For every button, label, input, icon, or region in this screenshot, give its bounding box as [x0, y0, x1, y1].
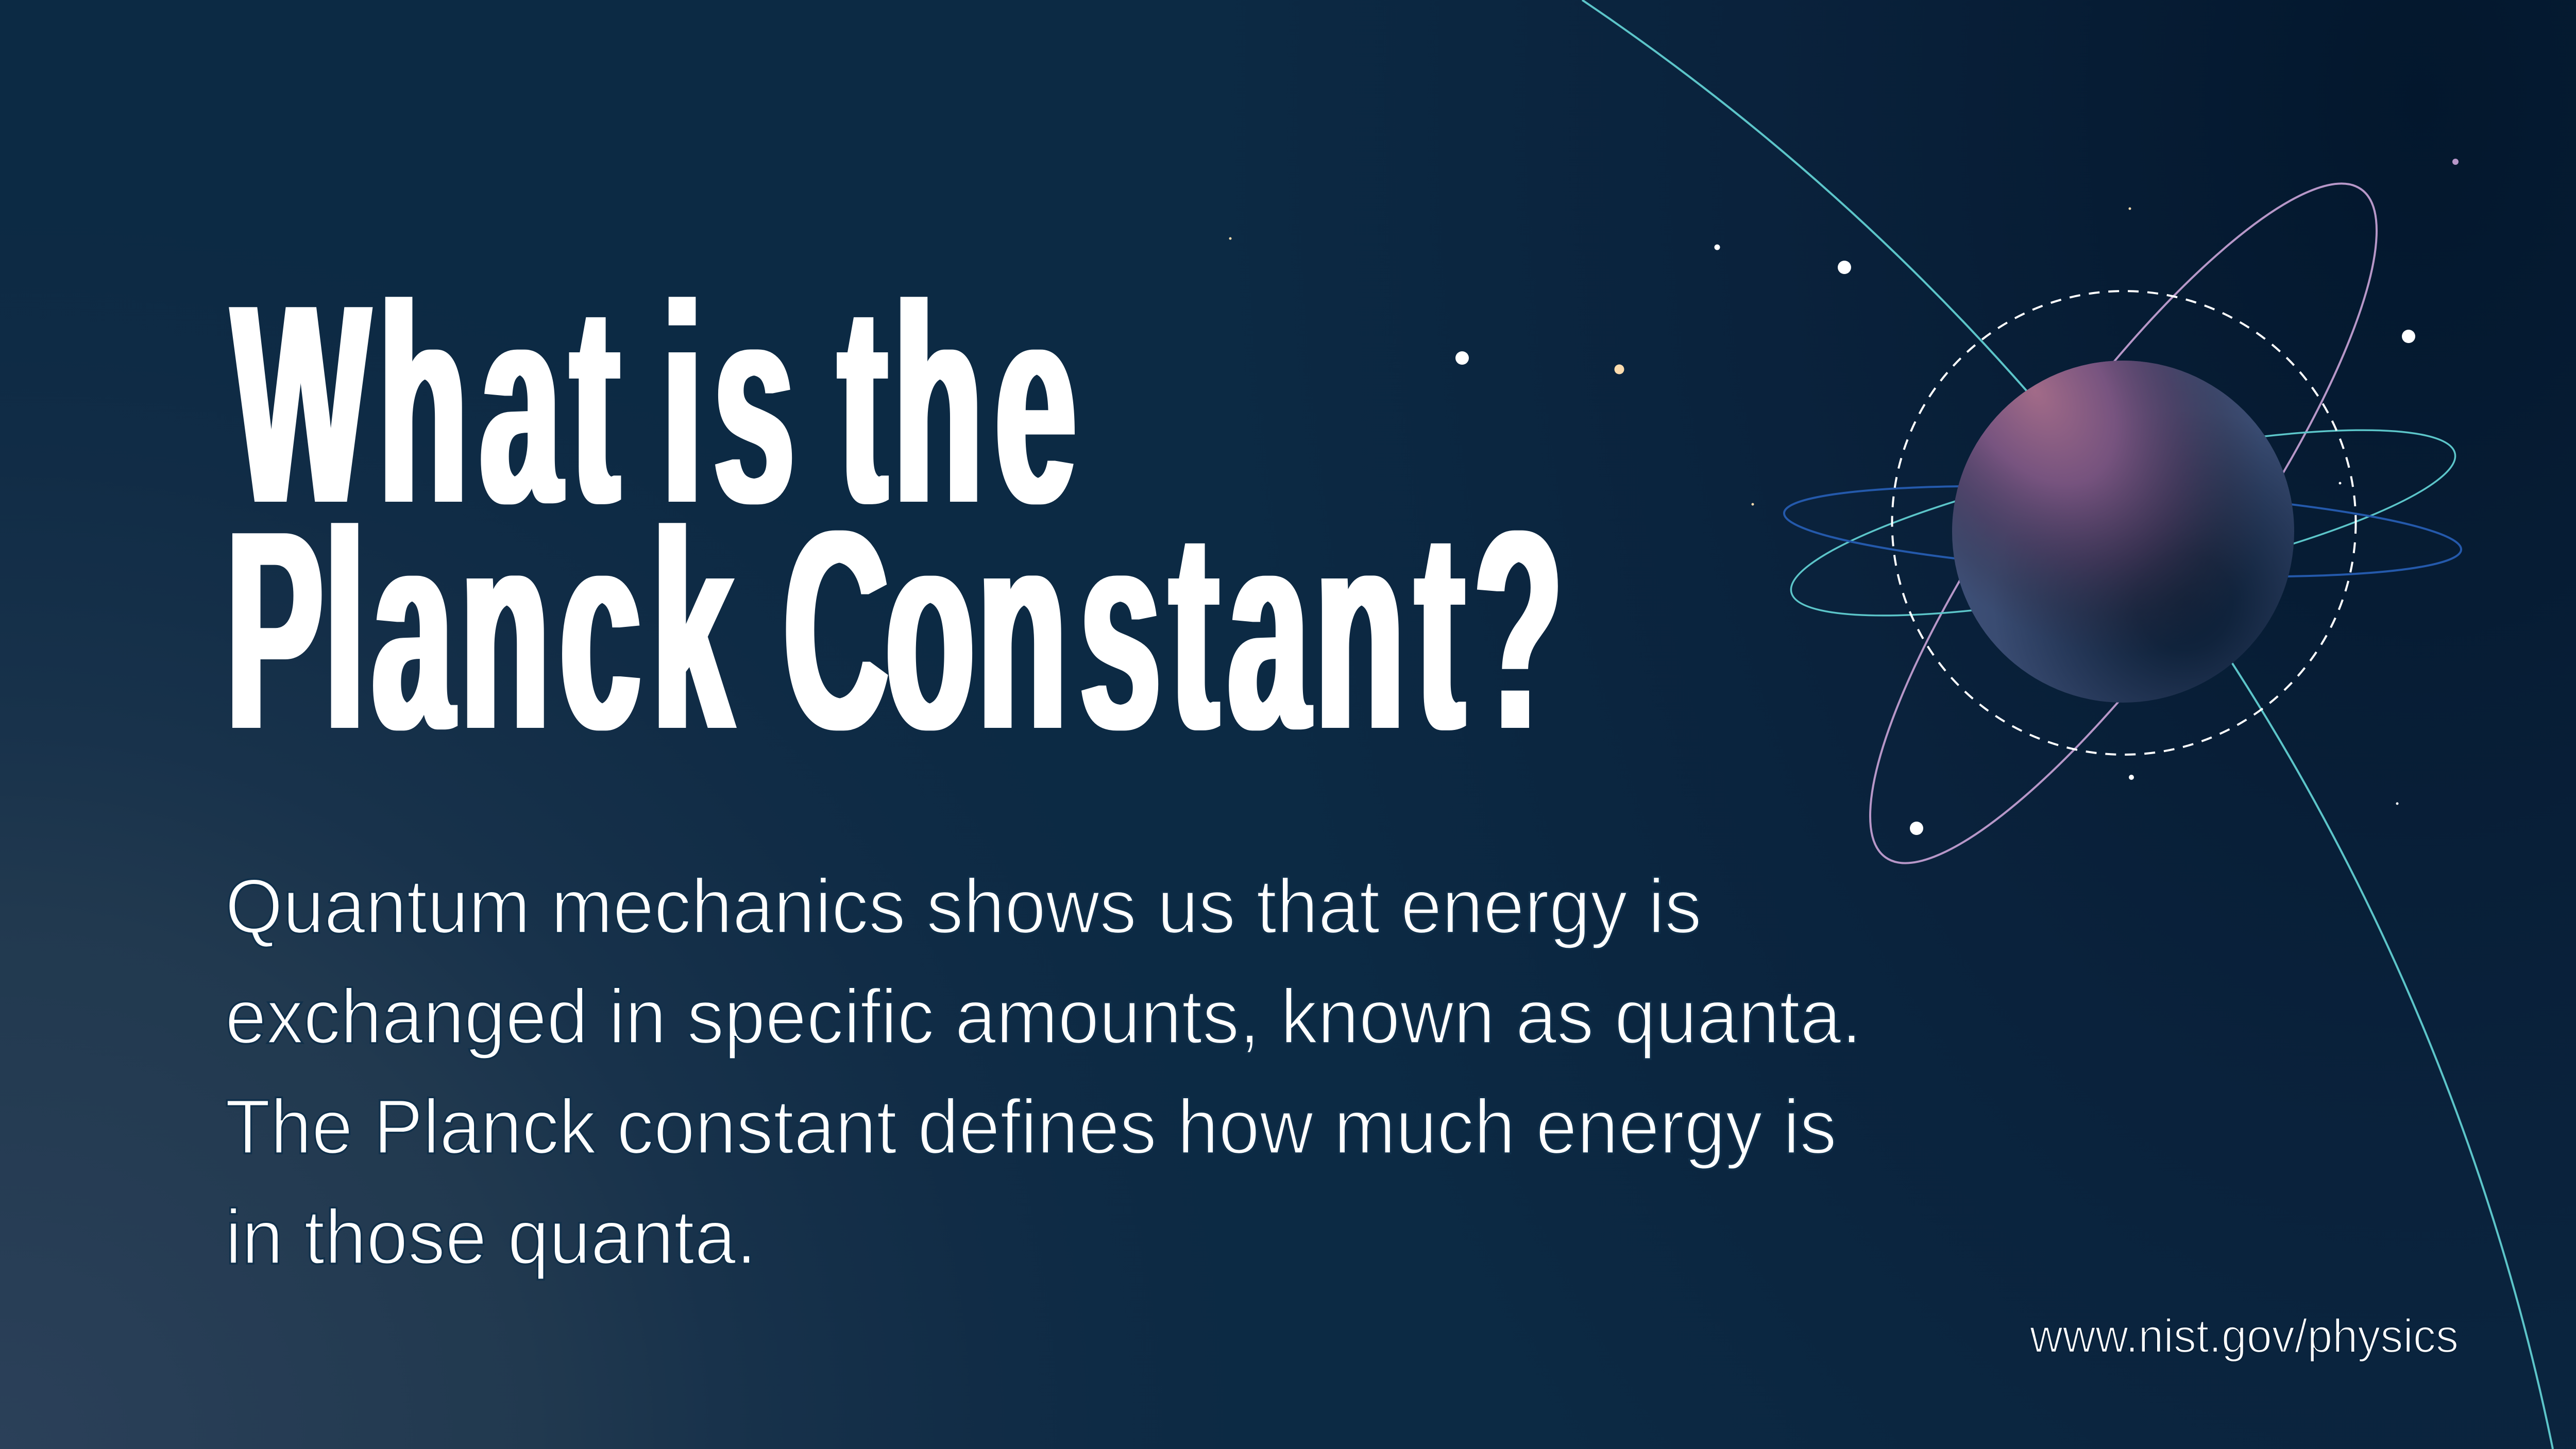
large teal orbit arc	[1582, 0, 2553, 1449]
stars	[1229, 159, 2459, 835]
dashed white orbit circle	[1892, 291, 2355, 755]
title: Planck Constant?	[226, 472, 1563, 788]
body text: Quantum mechanics shows us that energy is	[225, 863, 1702, 949]
body text: in those quanta.	[225, 1194, 757, 1280]
title	[226, 246, 1563, 788]
body text	[225, 863, 1862, 1280]
planet	[1952, 361, 2294, 703]
website url: www.nist.gov/physics	[2029, 1310, 2459, 1362]
lilac orbit ellipse	[1799, 128, 2448, 919]
blue orbit ellipse	[1782, 472, 2463, 591]
planet system illustration	[1778, 128, 2468, 919]
body text: The Planck constant defines how much energy is	[225, 1083, 1837, 1170]
teal orbit ellipse	[1778, 392, 2468, 654]
body text: exchanged in specific amounts, known as quanta.	[225, 973, 1862, 1060]
title: What is the	[232, 246, 1076, 562]
